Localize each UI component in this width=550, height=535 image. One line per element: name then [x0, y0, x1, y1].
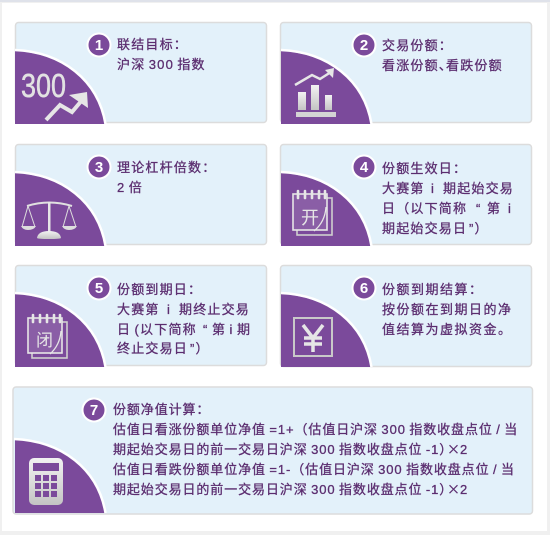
panel 4: effective date [280, 144, 532, 246]
text: expiry date [117, 282, 251, 356]
text: effective date: i [508, 201, 512, 216]
text: trade shares: 交易份额： [382, 38, 453, 53]
icon: calendar open [281, 172, 372, 246]
text: effective date: 第 [487, 201, 501, 216]
icon: calendar closed: 闭 [36, 331, 53, 350]
text: expiry date: “ [203, 322, 209, 337]
text: effective date: ”） [469, 221, 489, 236]
text: effective date: 份额生效日： [382, 161, 467, 176]
text: net value calculation: 期起始交易日的前一交易日沪深 300 指数收盘点位 -1） [113, 442, 453, 457]
number badge 5: 5 [95, 280, 103, 297]
text: expiry date: 第 i [212, 322, 234, 337]
text: expiry date: 日 (以下简称 [117, 322, 197, 337]
text: expiry settlement: 份额到期结算： [382, 282, 484, 297]
number badge 3: 3 [95, 159, 103, 176]
number badge 1: 1 [95, 37, 103, 54]
icon: calendar closed [15, 293, 106, 367]
text: index target: 联结目标： [117, 37, 188, 52]
text: net value calculation: 期起始交易日的前一交易日沪深 300 指数收盘点位 -1） [113, 482, 453, 497]
text: leverage: 理论杠杆倍数： [117, 160, 216, 175]
icon: 300 with rising arrow [15, 50, 106, 124]
text: expiry settlement: 值结算为虚拟资金。 [382, 322, 513, 337]
text: effective date: 期起始交易 [443, 181, 514, 196]
number badge 5 [88, 276, 110, 300]
number badge 1 [88, 34, 110, 56]
text: net value calculation: 份额净值计算： [113, 402, 210, 417]
text: net value calculation: × [447, 479, 461, 498]
icon: bar chart with arrow [281, 50, 372, 124]
text: trade shares: 看涨份额、 [382, 58, 453, 73]
text: net value calculation: 2 [460, 482, 468, 497]
text: net value calculation: 2 [460, 442, 468, 457]
text: effective date: “ [476, 201, 482, 216]
text: expiry date: 大赛第 [117, 302, 160, 317]
text: trade shares [382, 38, 503, 73]
text: net value calculation [113, 402, 518, 498]
text: expiry date: 终止交易日 [117, 341, 188, 356]
number badge 6 [352, 276, 376, 300]
text: index target: 沪深 300 指数 [117, 57, 206, 72]
text: expiry date: 期终止交易 [179, 302, 250, 317]
text: expiry date: ”） [190, 341, 210, 356]
text: expiry date: 份额到期日： [117, 282, 202, 297]
number badge 7 [82, 398, 106, 422]
number badge 6: 6 [360, 280, 368, 297]
panel 1: index target [15, 22, 266, 124]
text: effective date: i [431, 181, 435, 196]
text: leverage [117, 160, 216, 195]
text: effective date: 期起始交易日 [382, 221, 467, 236]
panel 5: expiry date [15, 266, 266, 367]
text: net value calculation: 估值日看跌份额单位净值 =1-（估值日沪深 300 指数收盘点位 / 当 [113, 462, 515, 477]
number badge 3 [88, 156, 110, 178]
icon: yen box [281, 293, 372, 367]
panel 7: net value calculation [13, 387, 532, 514]
text: expiry date: i [167, 302, 171, 317]
number badge 2: 2 [360, 37, 368, 54]
number badge 7: 7 [90, 402, 98, 419]
text: effective date: 日（以下简称 [382, 201, 467, 216]
text: effective date: 大赛第 [382, 181, 425, 196]
text: trade shares: 看跌份额 [446, 58, 503, 73]
text: expiry settlement [382, 282, 513, 337]
number badge 2 [352, 34, 376, 56]
panel 6: expiry settlement [280, 266, 532, 367]
icon: calendar open: 开 [301, 208, 319, 228]
text: net value calculation: 估值日看涨份额单位净值 =1+（估值日沪深 300 指数收盘点位 / 当 [113, 422, 518, 437]
panel 2: trade shares [280, 22, 532, 124]
icon: balance scale [15, 172, 106, 246]
panel 3: leverage [15, 144, 266, 246]
icon: 300 with rising arrow: 300 [21, 67, 66, 104]
icon: calculator [14, 439, 106, 513]
text: leverage: 2 倍 [117, 180, 143, 195]
text: expiry settlement: 按份额在到期日的净 [382, 302, 513, 317]
text: effective date [382, 161, 514, 236]
number badge 4: 4 [360, 159, 369, 176]
text: expiry date: 期 [237, 322, 251, 337]
number badge 4 [352, 156, 376, 178]
text: index target [117, 37, 206, 72]
text: net value calculation: × [447, 439, 461, 458]
